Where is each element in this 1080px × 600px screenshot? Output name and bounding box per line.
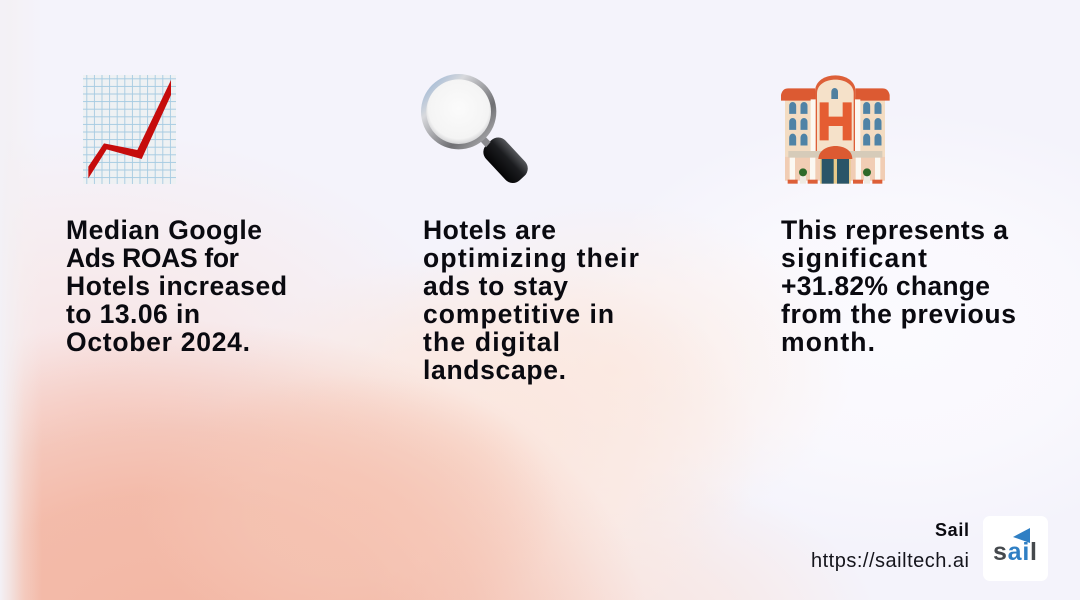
text block: hotels optimizing: the digital: [423, 327, 560, 357]
text block: percent change: [781, 215, 1016, 357]
text block: hotels optimizing: [423, 215, 639, 385]
text block: hotels optimizing: Hotels are: [423, 215, 556, 245]
text block: median ROAS: to 13.06 in: [66, 299, 200, 329]
text block: median ROAS: [66, 215, 287, 357]
brand url: https://sailtech.ai: [811, 550, 969, 572]
text block: percent change: month.: [781, 327, 875, 357]
text block: percent change: This represents a: [781, 215, 1008, 245]
logo: sail: [983, 516, 1048, 581]
icon: chart trending upward: [83, 75, 176, 184]
icon: magnifying glass: [421, 74, 532, 187]
text block: percent change: from the previous: [781, 299, 1016, 329]
text block: hotels optimizing: ads to stay: [423, 271, 568, 301]
text block: hotels optimizing: landscape.: [423, 355, 566, 385]
text block: median ROAS: Ads ROAS for: [66, 243, 239, 273]
text block: hotels optimizing: competitive in: [423, 299, 614, 329]
brand name: Sail: [935, 520, 969, 540]
logo: sail: sail: [993, 538, 1037, 566]
text block: median ROAS: Median Google: [66, 215, 262, 245]
text block: median ROAS: Hotels increased: [66, 271, 287, 301]
text block: median ROAS: October 2024.: [66, 327, 250, 357]
icon: hotel building: [781, 75, 890, 184]
text block: percent change: significant: [781, 243, 927, 273]
text block: percent change: +31.82% change: [781, 271, 990, 301]
text block: hotels optimizing: optimizing their: [423, 243, 639, 273]
